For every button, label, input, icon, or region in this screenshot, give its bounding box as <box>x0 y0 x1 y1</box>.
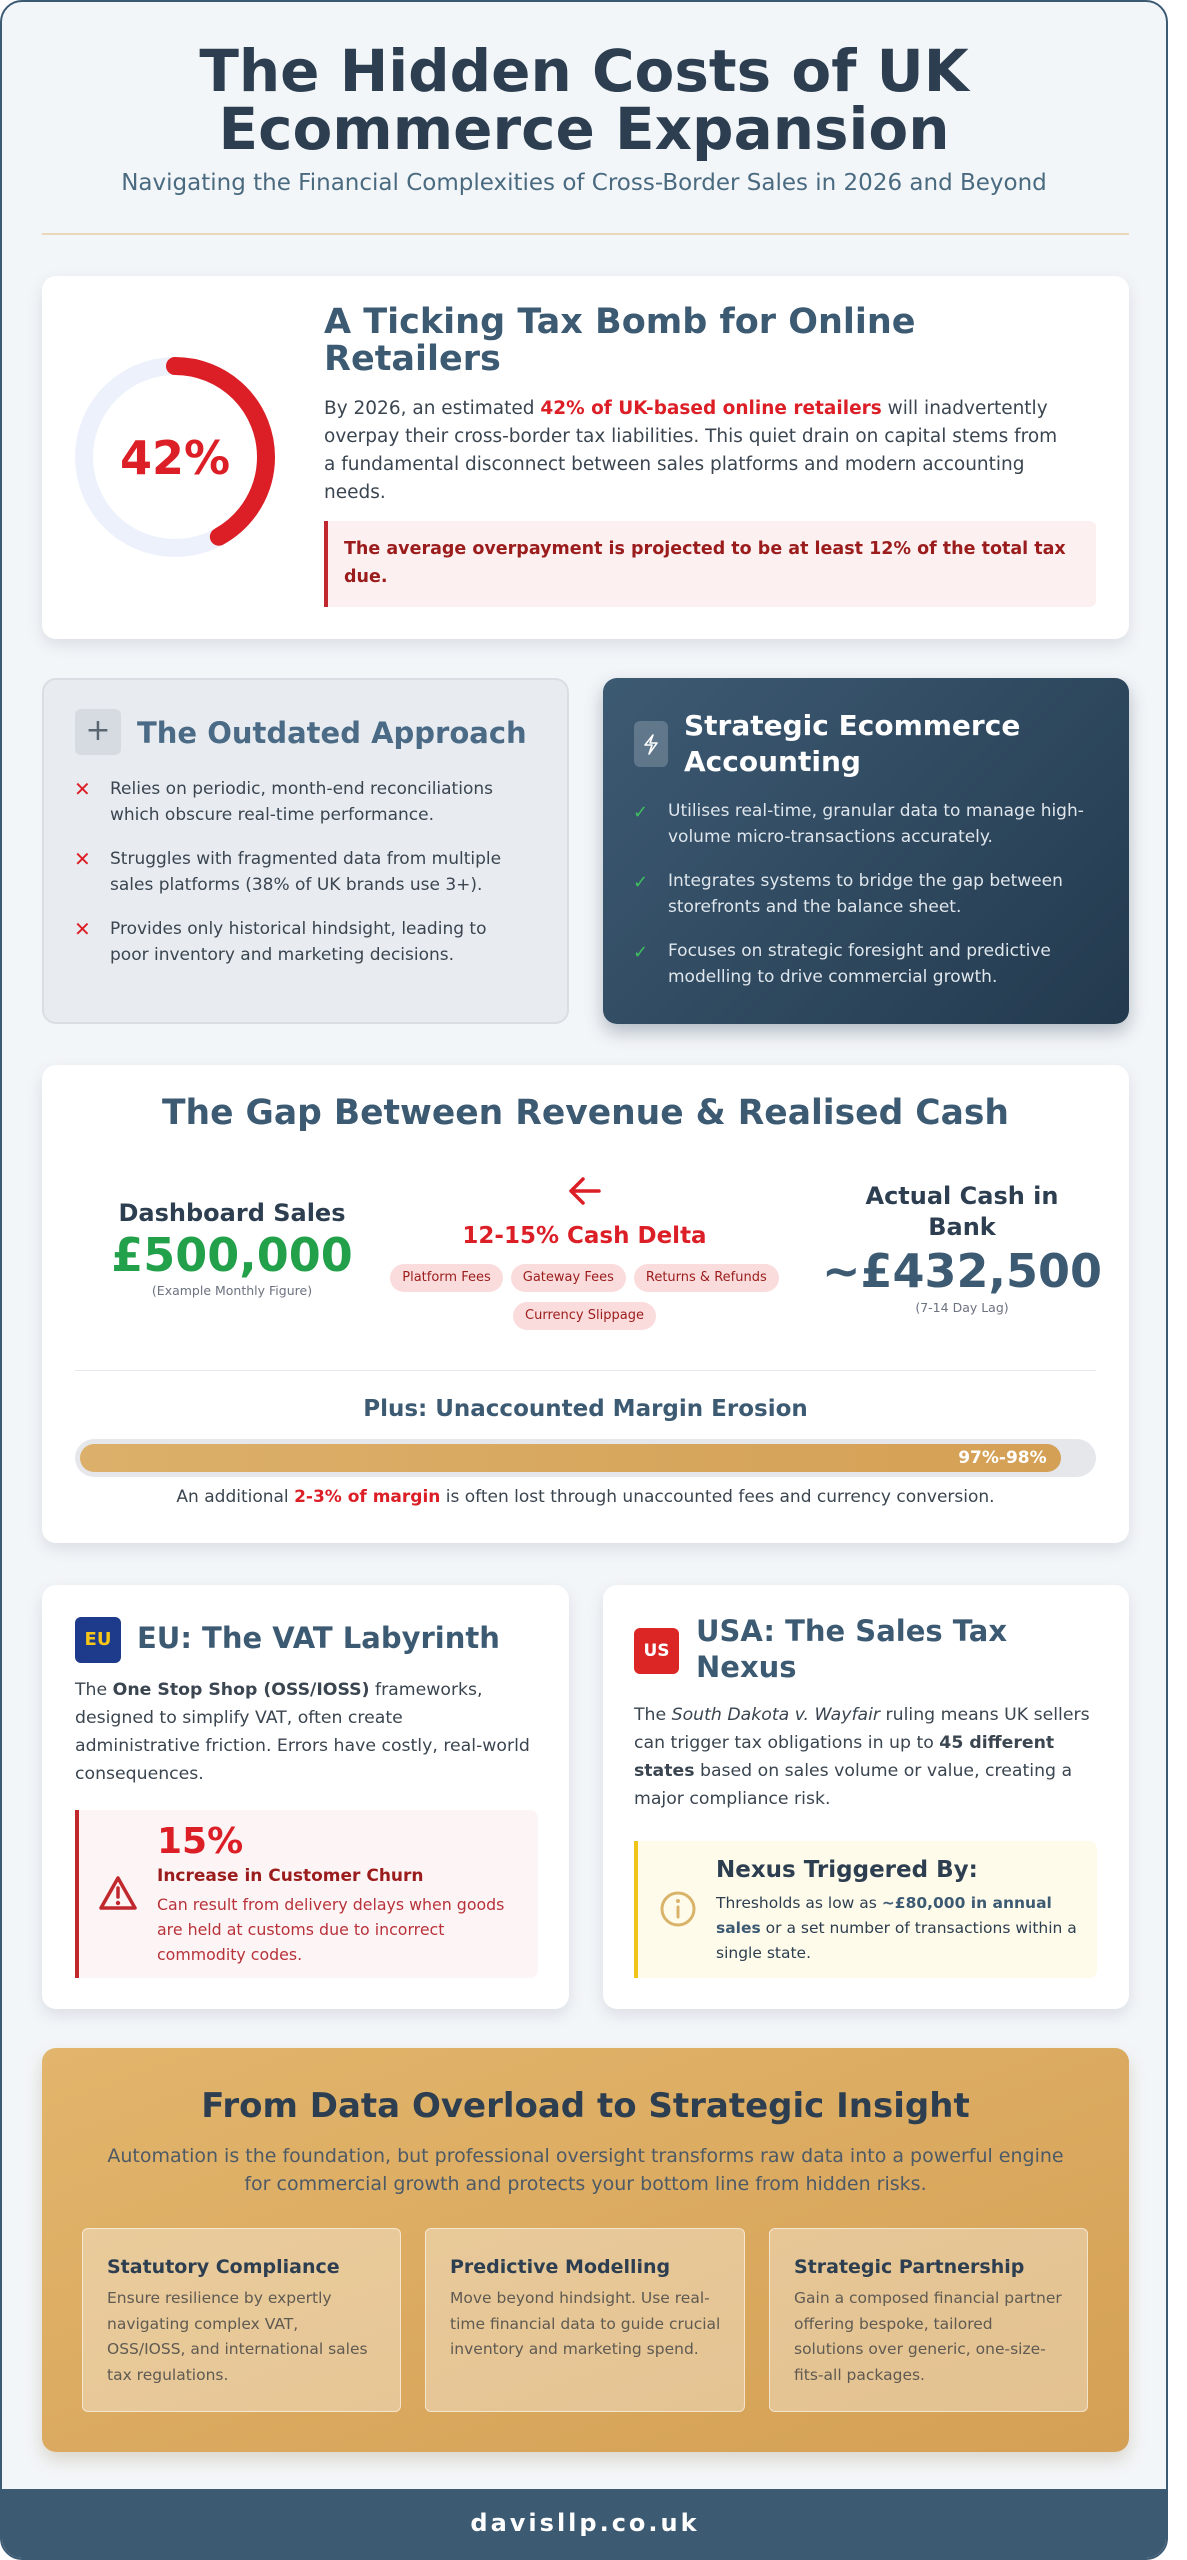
list: Relies on periodic, month-end reconciliations which obscure real-time performance. <box>110 779 493 825</box>
title <box>199 37 970 163</box>
panel: revenue vs cash gap <box>42 1065 1129 1543</box>
list: Integrates systems to bridge the gap between storefronts and the balance sheet. <box>668 871 1063 917</box>
panel: EU VAT <box>42 1585 569 2009</box>
body text: By 2026, an estimated 42% of UK-based online retailers will inadvertently <box>324 398 1048 419</box>
list: Focuses on strategic foresight and predictive modelling to drive commercial growth. <box>668 941 1051 987</box>
body: The One Stop Shop (OSS/IOSS) frameworks, <box>75 1680 483 1700</box>
actual cash: Actual Cash in <box>866 1182 1058 1210</box>
callout: The average overpayment is projected to be at least 12% of the total tax due. <box>344 539 1066 587</box>
subtitle: Navigating the Financial Complexities of Cross-Border Sales in 2026 and Beyond <box>121 170 1047 196</box>
footer <box>2 2489 1168 2560</box>
callout: nexus: Thresholds as low as ~£80,000 in annual sales or a set number of transactions within a single state. <box>716 1894 1077 1962</box>
dashboard sales <box>111 1199 353 1298</box>
cash delta: Currency Slippage <box>525 1308 644 1323</box>
cash delta: 12-15% Cash Delta <box>462 1223 707 1249</box>
cash delta: Returns & Refunds <box>646 1270 767 1285</box>
heading: A Ticking Tax Bomb for Online Retailers <box>324 302 916 379</box>
arrow <box>569 1177 601 1205</box>
box: compliance <box>82 2228 401 2412</box>
heading: The Gap Between Revenue & Realised Cash <box>162 1093 1009 1133</box>
actual cash: (7-14 Day Lag) <box>915 1300 1009 1315</box>
donut chart 42% <box>75 357 275 557</box>
dashboard sales: (Example Monthly Figure) <box>152 1283 312 1298</box>
icon: EU badge <box>75 1617 121 1663</box>
body: consequences. <box>75 1764 204 1784</box>
list: ✕ <box>74 847 91 871</box>
body: The South Dakota v. Wayfair ruling means UK sellers can trigger tax obligations in up to 45 different states based on sales volume or value, creating a major compliance risk. <box>634 1705 1090 1809</box>
donut chart 42%: 42% <box>120 431 230 485</box>
margin erosion heading: Plus: Unaccounted Margin Erosion <box>363 1396 808 1422</box>
intro text: Automation is the foundation, but professional oversight transforms raw data into a powerful engine for commercial growth and protects your bottom line from hidden risks. <box>107 2145 1064 2195</box>
body text: overpay their cross-border tax liabilities. This quiet drain on capital stems from <box>324 426 1057 447</box>
panel: strategic accounting <box>603 678 1129 1024</box>
body <box>74 1680 530 1784</box>
callout: nexus: Nexus Triggered By: <box>716 1857 978 1883</box>
body text <box>324 398 1057 503</box>
panel: USA sales tax <box>603 1585 1129 2009</box>
icon: plus <box>75 709 121 755</box>
title: Ecommerce Expansion <box>218 95 950 163</box>
body text: needs. <box>324 482 386 503</box>
box: partnership <box>769 2228 1088 2412</box>
caption: An additional 2-3% of margin is often lost through unaccounted fees and currency conversion. <box>176 1487 995 1507</box>
bar chart <box>75 1439 1096 1477</box>
cash delta <box>390 1177 779 1330</box>
panel: outdated approach <box>42 678 569 1024</box>
box: modelling: Predictive Modelling <box>450 2256 670 2278</box>
box: modelling <box>425 2228 745 2412</box>
callout: nexus <box>634 1841 1097 1978</box>
icon: info <box>660 1892 696 1926</box>
callout: churn <box>75 1810 538 1978</box>
dashboard sales: Dashboard Sales <box>118 1199 346 1227</box>
icon: bolt <box>634 721 668 767</box>
list: Struggles with fragmented data from multiple sales platforms (38% of UK brands use 3+). <box>110 849 501 895</box>
callout: churn: 15% <box>157 1821 243 1862</box>
icon: plus: + <box>85 713 111 748</box>
list: Utilises real-time, granular data to manage high-volume micro-transactions accurately. <box>668 801 1084 847</box>
bar chart: 97%-98% <box>958 1448 1047 1468</box>
icon: US badge <box>634 1628 679 1674</box>
list: Provides only historical hindsight, leading to poor inventory and marketing decisions. <box>110 919 486 965</box>
heading: The Outdated Approach <box>137 716 527 750</box>
list: ✓ <box>633 802 648 823</box>
actual cash: ~£432,500 <box>822 1244 1102 1298</box>
list <box>633 801 1084 987</box>
list: ✓ <box>633 872 648 893</box>
list: ✕ <box>74 917 91 941</box>
title: The Hidden Costs of UK <box>199 37 969 105</box>
icon: warning <box>99 1876 137 1910</box>
cash delta: Gateway Fees <box>523 1270 614 1285</box>
panel: strategic insight <box>42 2048 1129 2452</box>
heading: USA: The Sales Tax Nexus <box>696 1614 1007 1684</box>
actual cash <box>822 1182 1102 1315</box>
body: designed to simplify VAT, often create <box>75 1708 403 1728</box>
box: partnership: Gain a composed financial partner offering bespoke, tailored solutions over generic, one-size-fits-all packages. <box>794 2289 1062 2384</box>
icon: EU badge: EU <box>85 1629 111 1650</box>
box: compliance: Statutory Compliance <box>107 2256 340 2278</box>
callout <box>324 521 1096 607</box>
icon: US badge: US <box>643 1641 670 1661</box>
actual cash: Bank <box>928 1213 996 1241</box>
callout: churn: Increase in Customer Churn <box>157 1866 424 1886</box>
dashboard sales: £500,000 <box>111 1228 353 1282</box>
callout: churn: Can result from delivery delays when goods are held at customs due to incorrect commodity codes. <box>157 1895 504 1964</box>
heading: Strategic Ecommerce Accounting <box>684 709 1020 778</box>
panel: tax bomb <box>42 276 1129 639</box>
list <box>74 777 501 965</box>
box: partnership: Strategic Partnership <box>794 2256 1024 2278</box>
box: modelling: Move beyond hindsight. Use real-time financial data to guide crucial inventory and marketing spend. <box>450 2289 720 2358</box>
body: administrative friction. Errors have costly, real-world <box>75 1736 530 1756</box>
list: ✓ <box>633 942 648 963</box>
footer: davisllp.co.uk <box>470 2509 700 2537</box>
cash delta: Platform Fees <box>402 1270 491 1285</box>
list: ✕ <box>74 777 91 801</box>
box: compliance: Ensure resilience by expertly navigating complex VAT, OSS/IOSS, and international sales tax regulations. <box>107 2289 368 2384</box>
heading: From Data Overload to Strategic Insight <box>201 2086 970 2126</box>
body text: a fundamental disconnect between sales platforms and modern accounting <box>324 454 1025 475</box>
heading: EU: The VAT Labyrinth <box>137 1621 500 1655</box>
